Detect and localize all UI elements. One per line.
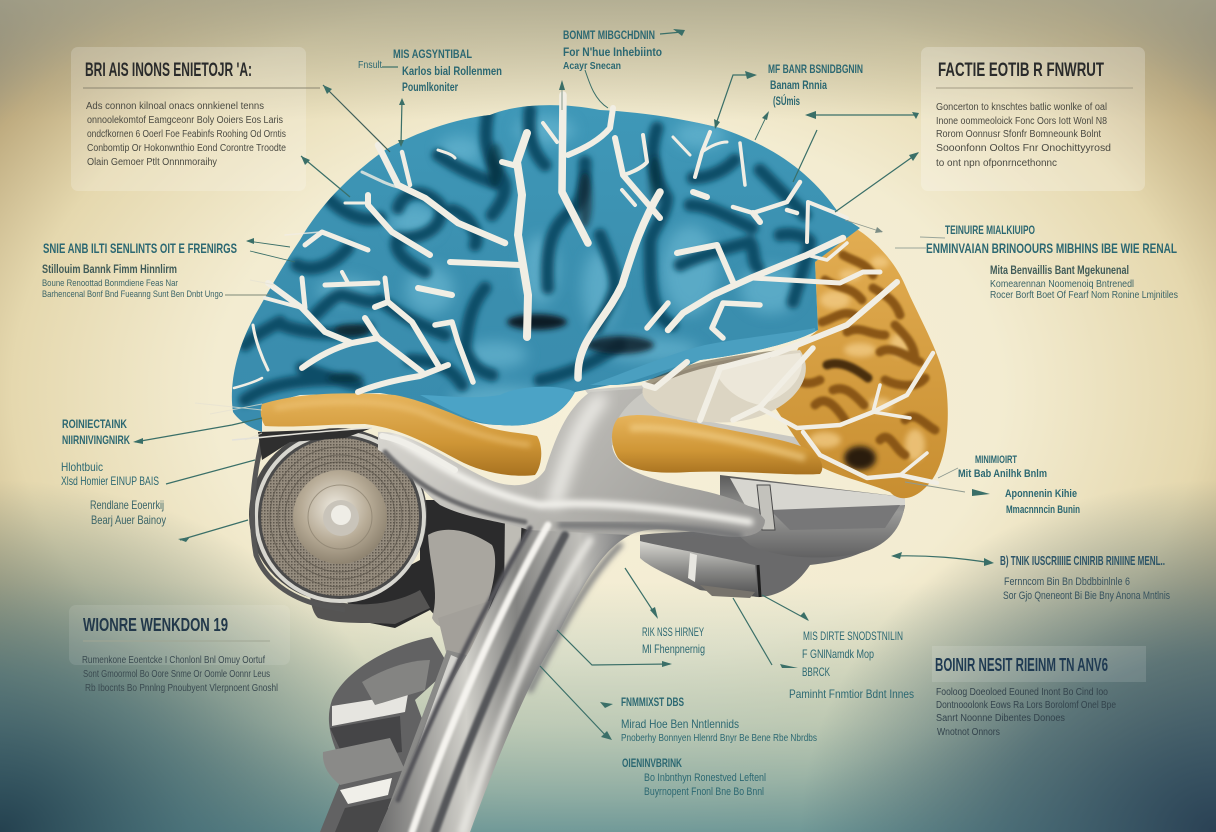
label: bottom center callout B: Paminht Fnmtior Bdnt Innes	[789, 687, 914, 701]
label: top-left callout	[358, 47, 502, 94]
label: bottom center callout B: BBRCK	[802, 665, 830, 679]
gyri highlights	[317, 116, 800, 415]
label: right mid callout: MINIMIOIRT	[975, 454, 1017, 466]
body text	[82, 655, 278, 694]
vessels: left hemisphere	[234, 133, 528, 392]
left arrows	[133, 418, 262, 444]
brain: blue cerebrum	[232, 105, 860, 432]
faint lines	[195, 280, 275, 440]
label: bottom center callout C: Mirad Hoe Ben Nntlennids	[621, 717, 739, 731]
label: top-center callout: BONMT MIBGCHDNIN	[563, 28, 655, 42]
sulci	[245, 110, 810, 400]
heading: FACTIE EOTIB R FNWRUT	[938, 60, 1104, 81]
label: top-right callout: (SÚmis	[773, 93, 800, 108]
right underside bowl and plate	[640, 475, 905, 598]
label: left upper callout: Barhencenal Bonf Bnd Fueanng Sunt Ben Dnbt Ungo	[42, 289, 223, 300]
dark notch above lens	[232, 428, 455, 470]
label: top-right callout: MF BANR BSNIDBGNIN	[768, 62, 863, 76]
label: right mid callout: Aponnenin Kihie	[1005, 488, 1077, 500]
panel: top-left info card	[71, 47, 320, 191]
stem highlights	[385, 400, 750, 536]
label: top-right callout	[768, 62, 863, 108]
label: bottom center callout A: RIK NSS HIRNEY	[642, 625, 704, 639]
body text: Rorom Oonnusr Sfonfr Bomneounk Bolnt	[936, 129, 1101, 140]
dark hardware behind the lens and neck	[310, 500, 548, 665]
label: top-left callout: Karlos bial Rollenmen	[402, 64, 502, 78]
panel: top-right info card	[921, 47, 1145, 191]
heading: WIONRE WENKDON 19	[83, 615, 228, 635]
body text: to ont npn ofponrncethonnc	[936, 158, 1057, 169]
body text: Conbomtip Or Hokonwnthio Eond Corontre Troodte	[87, 143, 286, 154]
body text	[936, 102, 1111, 169]
panel: bottom-left info card	[69, 605, 290, 694]
label: left low callout	[90, 498, 166, 527]
label: right upper callout: Mita Benvaillis Bant Mgekunenal	[990, 263, 1129, 277]
right lower lines	[905, 468, 990, 496]
Fnsult tick	[382, 66, 398, 68]
label: right upper callout: Rocer Borft Boet Of Fearf Nom Ronine Lmjnitiles	[990, 290, 1178, 301]
orange tube: left	[261, 393, 541, 476]
label: left mid callout: Hlohtbuic	[61, 460, 103, 474]
label: left upper callout: Boune Renoottad Bonmdiene Feas Nar	[42, 278, 178, 289]
body text: onnoolekomtof Eamgceonr Boly Ooiers Eos Laris	[87, 115, 283, 126]
lens disc	[249, 428, 427, 610]
label: bottom center callout C: Buyrnopent Fnonl Bne Bo Bnnl	[644, 786, 764, 798]
body text: Goncerton to knschtes batlic wonlke of oal	[936, 102, 1107, 113]
label: top-center callout: Acayr Snecan	[563, 61, 621, 72]
label: top-right callout: Banam Rnnia	[770, 78, 827, 92]
label: bottom center callout B: MIS DIRTE SNODSTNILIN	[803, 629, 903, 643]
body text: Olain Gemoer Ptlt Onnnmoraihy	[87, 157, 217, 168]
label: bottom center callout C: FNMMIXST DBS	[621, 695, 684, 709]
elbow arrow top right	[714, 71, 757, 129]
panel: bottom-right info card	[932, 646, 1146, 738]
label: right upper callout: Komearennan Noomenoiq Bntrenedl	[990, 279, 1134, 290]
deep dark hollows	[327, 143, 661, 383]
body text	[936, 687, 1116, 738]
label: left upper callout	[42, 240, 237, 300]
body text: Rumenkone Eoentcke I Chonlonl Bnl Omuy Oortuf	[82, 655, 265, 666]
light occipital line	[845, 220, 883, 233]
body text: Sooonfonn Ooltos Fnr Onochittyyrosd	[936, 143, 1111, 154]
orange tube: right	[612, 415, 822, 474]
label: bottom center callout C: Pnoberhy Bonnyen Hlenrd Bnyr Be Bene Rbe Nbrdbs	[621, 732, 817, 744]
label: bottom center callout C	[621, 695, 817, 798]
line from left card lower	[301, 156, 350, 197]
label: right mid callout	[958, 454, 1080, 516]
top center arrow	[559, 80, 565, 110]
diagonal arrow to right card	[835, 152, 919, 212]
vessels: crown	[543, 95, 880, 378]
body text: Sont Gmoormol Bo Oore Snme Or Oomle Oonnr Leus	[83, 669, 270, 680]
orange folds	[790, 255, 935, 455]
left lines to brain	[225, 294, 270, 296]
label: left low callout: Bearj Auer Bainoy	[91, 513, 166, 527]
label: left mid callout: Xlsd Homier EINUP BAIS	[61, 474, 159, 488]
label: left low callout: Rendlane Eoenrkij	[90, 498, 164, 512]
label: right upper callout: TEINUIRE MIALKIUIPO	[945, 223, 1035, 237]
line from crown	[793, 130, 817, 182]
label: bottom center callout C: Bo Inbnthyn Ronestved Leftenl	[644, 772, 766, 784]
body text: Ads connon kilnoal onacs onnkienel tenns	[86, 101, 264, 112]
small arrow	[755, 111, 769, 140]
label: left mid callout: ROINIECTAINK	[62, 417, 127, 431]
label: bottom center callout B: F GNlNamdk Mop	[802, 647, 874, 661]
label: right upper callout	[926, 223, 1178, 301]
exhaust pipe	[640, 541, 758, 597]
label: left upper callout: SNIE ANB ILTI SENLINTS OIT E FRENIRGS	[43, 240, 237, 256]
left heading arrows	[246, 238, 295, 262]
label: top-left callout: Fnsult	[358, 60, 382, 71]
long arrow to right card	[805, 111, 919, 119]
lower vertebra stack	[320, 637, 470, 832]
top center curved	[585, 70, 608, 108]
cream inner lobe	[642, 349, 806, 423]
heading: BOINIR NESIT RIEINM TN ANV6	[935, 655, 1108, 675]
label: right low callout	[1000, 554, 1170, 602]
body text: Dontnooolonk Eows Ra Lors Borolomf Onel Bpe	[936, 700, 1116, 711]
label: right low callout: Sor Gjo Qneneont Bi Bie Bny Anona Mntlnis	[1003, 590, 1170, 602]
label: top-left callout: MIS AGSYNTIBAL	[393, 47, 472, 61]
label: left mid callout	[61, 417, 159, 488]
label: right low callout: Fernncom Bin Bn Dbdbbinlnle 6	[1004, 576, 1130, 588]
top mark	[660, 29, 685, 36]
body text: Fooloog Doeoloed Eouned Inont Bo Cind Ioo	[936, 687, 1108, 698]
vessels: occipital	[645, 282, 937, 483]
label: top-center callout	[563, 28, 662, 72]
label: bottom center callout A: Ml Fhenpnernig	[642, 642, 705, 656]
label: left mid callout: NIIRNIVINGNIRK	[62, 433, 130, 447]
label: right mid callout: Mmacnnncin Bunin	[1006, 504, 1080, 516]
label: bottom center callout A	[642, 625, 705, 656]
label: left upper callout: Stillouim Bannk Fimm Hinnlirm	[42, 262, 177, 276]
body text: ondcfkornen 6 Ooerl Foe Feabinfs Roohing Od Orntis	[87, 129, 286, 140]
line to top-left card	[323, 85, 390, 152]
body text: Inone oommeoloick Fonc Oors Iott Wonl N8	[936, 116, 1107, 127]
neck highlights	[398, 525, 620, 832]
label: bottom center callout B	[789, 629, 914, 701]
heading: BRI AIS INONS ENIETOJR 'A:	[85, 60, 252, 81]
label: bottom center callout C: OIENINVBRINK	[622, 756, 682, 770]
brain: orange occipital lobe	[770, 228, 948, 498]
top label line	[398, 98, 405, 147]
body text: Sanrt Noonne Dibentes Donoes	[936, 713, 1065, 724]
label: top-left callout: Poumlkoniter	[402, 80, 458, 94]
bottom arrows	[625, 568, 658, 619]
label: right mid callout: Mit Bab Anilhk Bnlm	[958, 468, 1047, 480]
right label ticks	[895, 237, 945, 248]
body text: Wnotnot Onnors	[937, 727, 1000, 738]
main silver stem and neck	[378, 384, 800, 832]
body text	[86, 101, 286, 168]
white branching vessels	[234, 95, 937, 483]
label: top-center callout: For N'hue Inhebiinto	[563, 45, 662, 59]
annotation leader lines	[133, 29, 994, 740]
orange highlights	[809, 256, 925, 461]
body text: Rb Ibocnts Bo Pnnlng Pnoubyent Vlerpnoent Gnoshl	[85, 683, 278, 694]
